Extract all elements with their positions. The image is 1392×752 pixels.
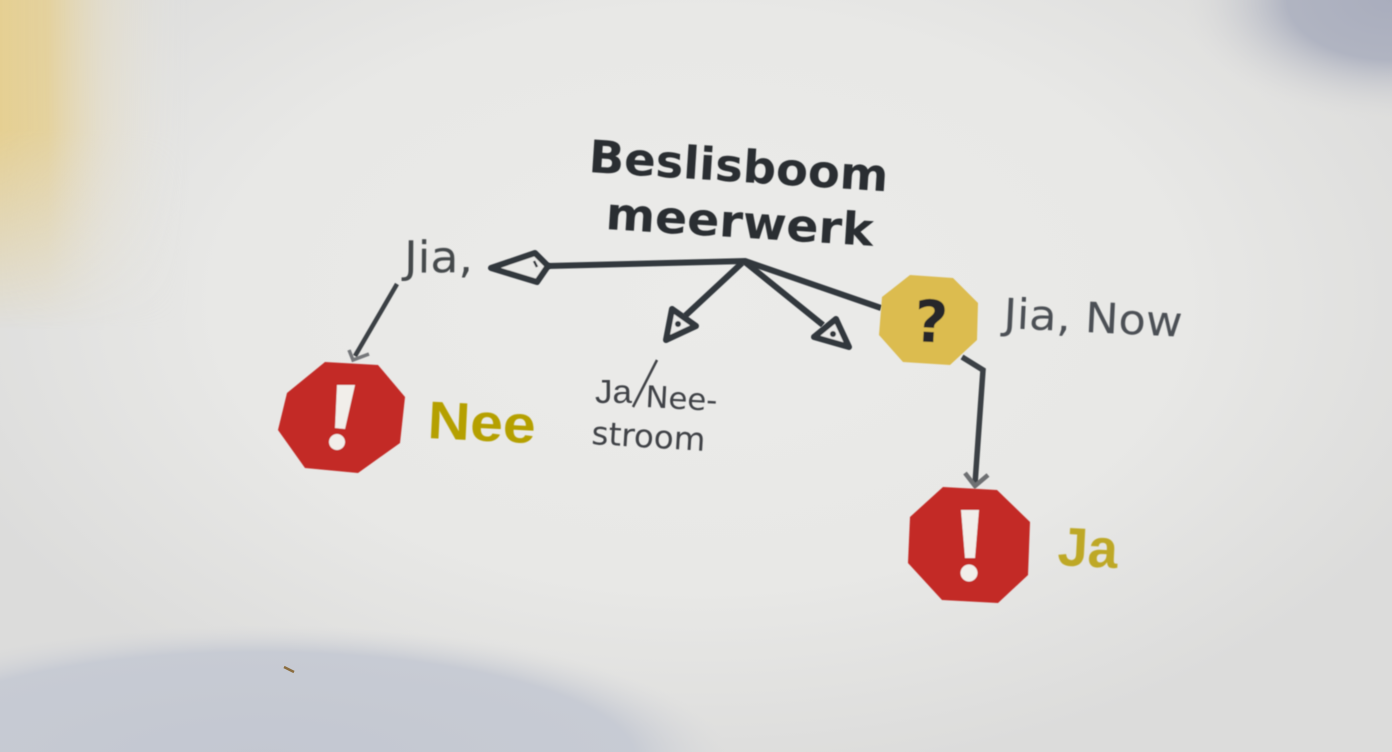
title: [587, 130, 890, 257]
icon: red warning octagon Nee: [278, 362, 405, 473]
label: Ja: Ja: [1056, 515, 1120, 580]
decision tree connectors: [548, 261, 881, 325]
icon: yellow question octagon: [879, 275, 978, 365]
icon: red warning octagon Ja: [908, 487, 1030, 603]
title: meerwerk: [604, 187, 876, 257]
arrowhead: down-left triangle: [666, 309, 696, 340]
title: Beslisboom: [587, 130, 890, 202]
label: Ja/Nee-stroom: stroom: [591, 414, 707, 459]
arrowhead: left diamond: [491, 253, 548, 282]
label: Ja/Nee-stroom: Ja: [595, 373, 633, 410]
arrow: question to Ja: [962, 357, 988, 486]
label: Ja/Nee-stroom: [591, 360, 718, 459]
arrow: Jia to Nee: [349, 284, 397, 360]
label: Jia, left: Jia,: [401, 232, 473, 284]
label: Ja/Nee-stroom: Nee-: [645, 380, 718, 419]
label: Jia, Now: Jia, Now: [999, 289, 1184, 347]
arrowhead: down-right triangle: [814, 319, 849, 347]
icon: yellow question octagon: ?: [912, 287, 950, 357]
label: Nee: Nee: [426, 391, 537, 455]
